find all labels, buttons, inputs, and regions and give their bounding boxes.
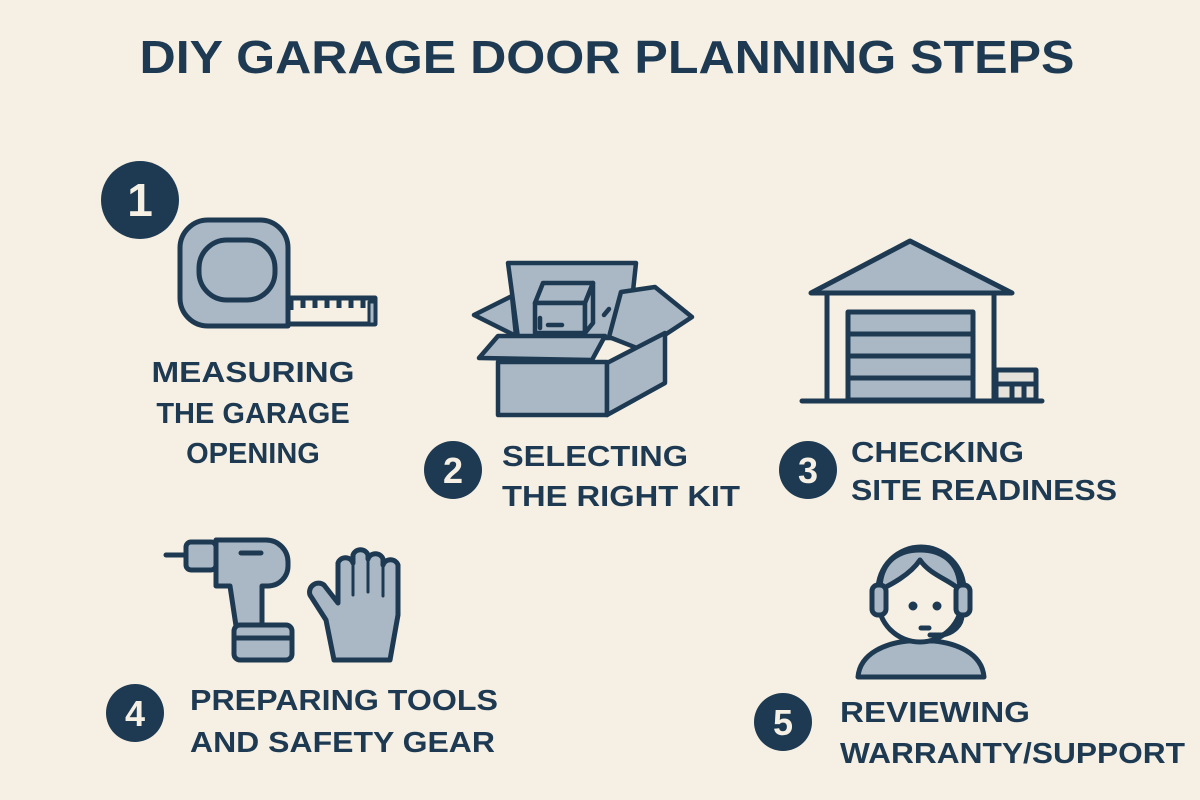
icon: open box	[474, 263, 692, 415]
label 1: THE GARAGE	[156, 398, 350, 430]
label 3	[851, 437, 1117, 507]
title: DIY GARAGE DOOR PLANNING STEPS	[140, 31, 1074, 83]
badge 3	[779, 441, 837, 499]
step 4: tools and gear	[106, 540, 498, 759]
icon: garage	[802, 241, 1042, 401]
label 2: THE RIGHT KIT	[502, 481, 740, 513]
step 2: selecting kit	[424, 263, 740, 513]
step 3: site readiness	[779, 241, 1117, 507]
label 3: CHECKING	[851, 437, 1024, 469]
badge 3: 3	[798, 450, 818, 491]
badge 2	[424, 441, 482, 499]
label 5: REVIEWING	[840, 697, 1030, 729]
label 5	[840, 697, 1185, 770]
icon: tape measure	[180, 220, 375, 326]
label 1: OPENING	[186, 438, 320, 470]
label 2	[502, 441, 740, 513]
badge 4	[106, 684, 164, 742]
label 2: SELECTING	[502, 441, 688, 473]
badge 5: 5	[773, 702, 793, 743]
label 1: MEASURING	[152, 357, 354, 389]
label 5: WARRANTY/SUPPORT	[840, 738, 1185, 770]
label 4: PREPARING TOOLS	[190, 685, 498, 717]
step 5: warranty/support	[754, 547, 1185, 770]
label 1	[152, 357, 354, 470]
badge 5	[754, 693, 812, 751]
badge 1: 1	[127, 174, 153, 226]
label 4: AND SAFETY GEAR	[190, 727, 495, 759]
icon: drill	[166, 540, 292, 660]
label 4	[190, 685, 498, 759]
badge 1	[101, 161, 179, 239]
badge 4: 4	[125, 693, 145, 734]
icon: support agent	[858, 547, 984, 677]
step 1: measuring	[101, 161, 375, 470]
badge 2: 2	[443, 450, 463, 491]
label 3: SITE READINESS	[851, 475, 1117, 507]
icon: glove	[310, 550, 398, 660]
